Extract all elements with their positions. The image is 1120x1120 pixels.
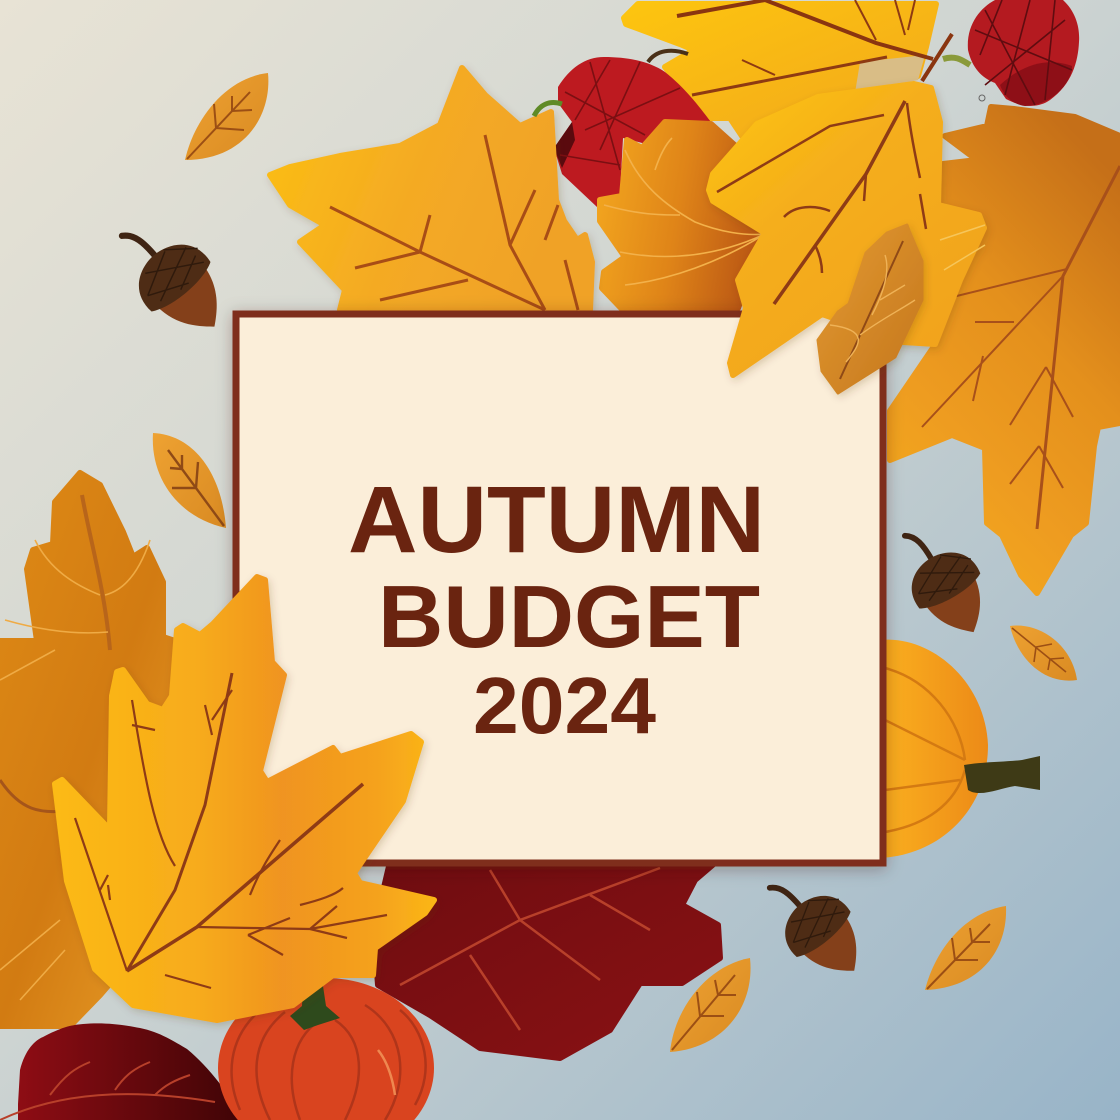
card bbox=[236, 314, 883, 863]
icon: acorn top left bbox=[102, 203, 244, 352]
leaf: front yellow maple bbox=[55, 577, 434, 1020]
pumpkin: right yellow bbox=[880, 640, 1040, 858]
leaf: dark red bottom left bbox=[0, 1023, 243, 1120]
fruit: red top right bbox=[943, 0, 1079, 106]
icon: small leaf right bbox=[1010, 626, 1077, 681]
title: AUTUMN: AUTUMN bbox=[348, 467, 765, 573]
leaf: top yellow cluster bbox=[624, 0, 952, 136]
icon: acorn right bbox=[884, 512, 1004, 650]
fruit: red top bbox=[554, 51, 711, 207]
leaf: dark red bottom bbox=[374, 862, 720, 1058]
icon: acorn bottom bbox=[751, 858, 881, 994]
leaf: orange behind front leaf bbox=[600, 122, 765, 310]
icon: small leaf lower right bbox=[925, 906, 1006, 990]
title: BUDGET: BUDGET bbox=[378, 567, 760, 666]
pumpkin: bottom orange bbox=[218, 978, 434, 1120]
icon: small leaf top left bbox=[185, 73, 268, 160]
fruit stem: green bbox=[534, 102, 562, 116]
leaf: large orange left bbox=[0, 473, 190, 1026]
leaf: top yellow oak bbox=[270, 68, 592, 310]
leaf: small tan over card bbox=[818, 225, 922, 393]
icon: small leaf left middle bbox=[153, 433, 226, 528]
icon: small leaf bottom bbox=[670, 958, 751, 1052]
leaf: large orange right bbox=[890, 107, 1120, 593]
title: 2024: 2024 bbox=[473, 661, 657, 750]
leaf: front yellow top right bbox=[709, 84, 985, 375]
